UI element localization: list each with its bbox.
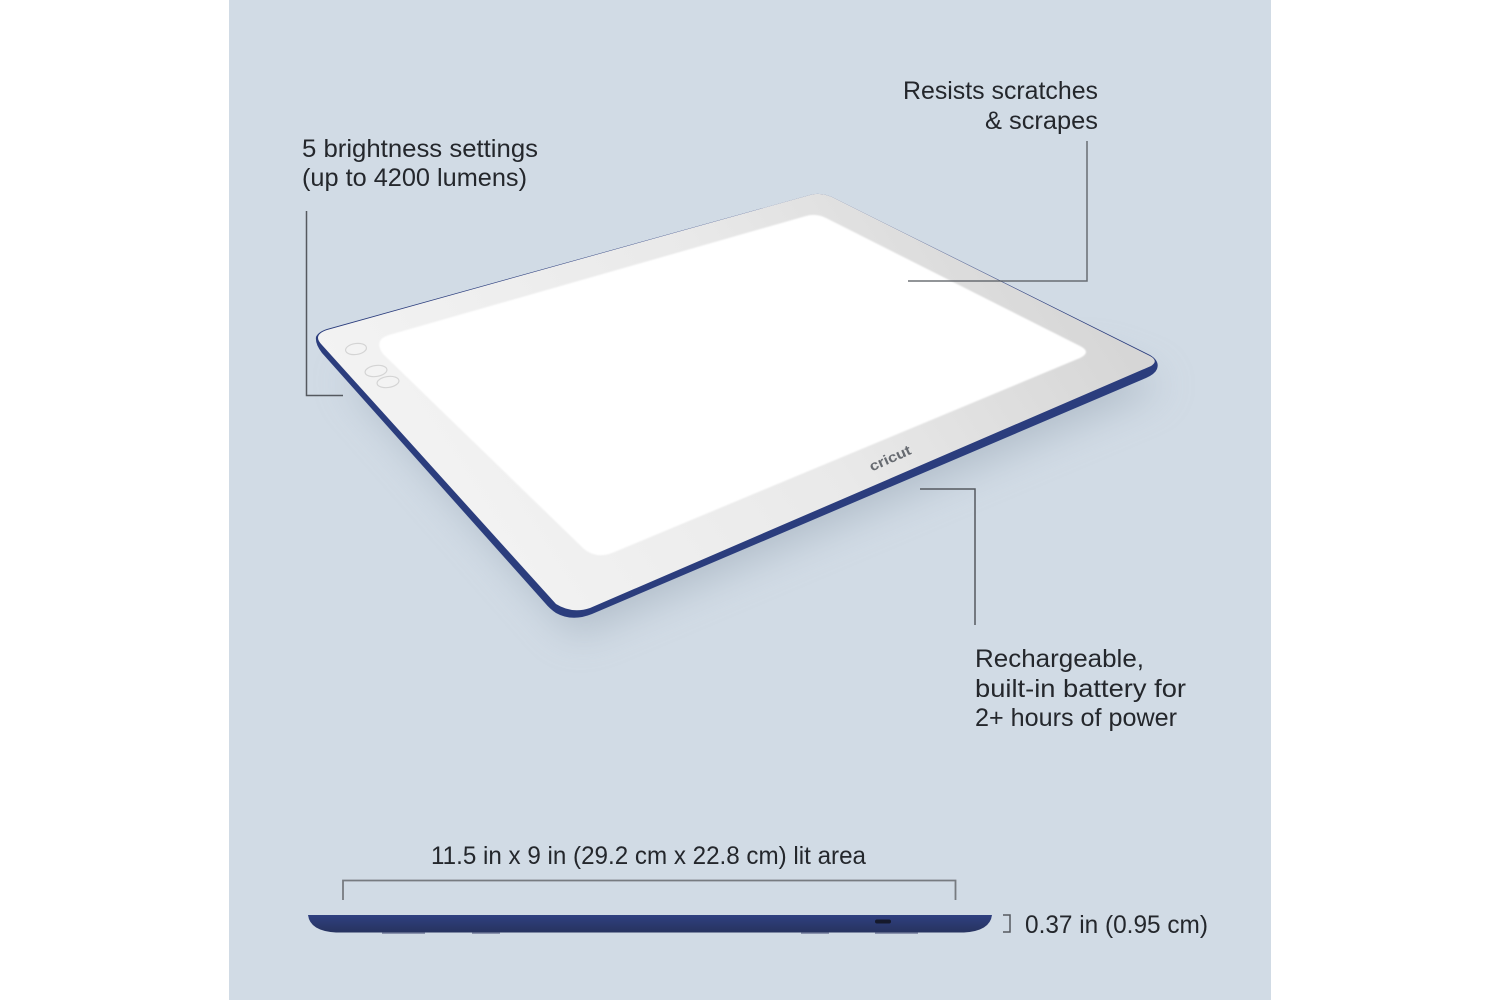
drop shadow xyxy=(345,360,1165,635)
callout: brightness settings xyxy=(302,135,538,396)
dimension: lit area: 11.5 in x 9 in (29.2 cm x 22.8 cm) lit area xyxy=(431,842,866,870)
background panel xyxy=(229,0,1271,1000)
grey top face xyxy=(318,194,1155,610)
dimension: thickness: 0.37 in (0.95 cm) xyxy=(1025,911,1208,939)
callout: scratch resistance xyxy=(903,77,1098,281)
brand logo: cricut xyxy=(867,442,914,474)
touch buttons xyxy=(345,342,400,389)
callout: rechargeable battery xyxy=(920,489,1186,732)
callout: scratch resistance: Resists scratches xyxy=(903,77,1098,105)
callout: rechargeable battery: built-in battery for xyxy=(975,675,1186,703)
dimension: lit area xyxy=(343,842,956,900)
side view of light pad xyxy=(308,915,992,934)
glowing lit area xyxy=(379,215,1086,555)
callout: brightness settings: (up to 4200 lumens) xyxy=(302,164,527,192)
callout: rechargeable battery: Rechargeable, xyxy=(975,645,1144,673)
callout: brightness settings: 5 brightness settings xyxy=(302,135,538,163)
callout: rechargeable battery: 2+ hours of power xyxy=(975,704,1177,732)
side body xyxy=(308,915,992,932)
charging port xyxy=(875,920,891,924)
light pad product illustration xyxy=(316,194,1165,635)
callout: scratch resistance: & scrapes xyxy=(985,107,1098,135)
rubber feet xyxy=(382,932,918,934)
navy body edge xyxy=(316,194,1158,618)
